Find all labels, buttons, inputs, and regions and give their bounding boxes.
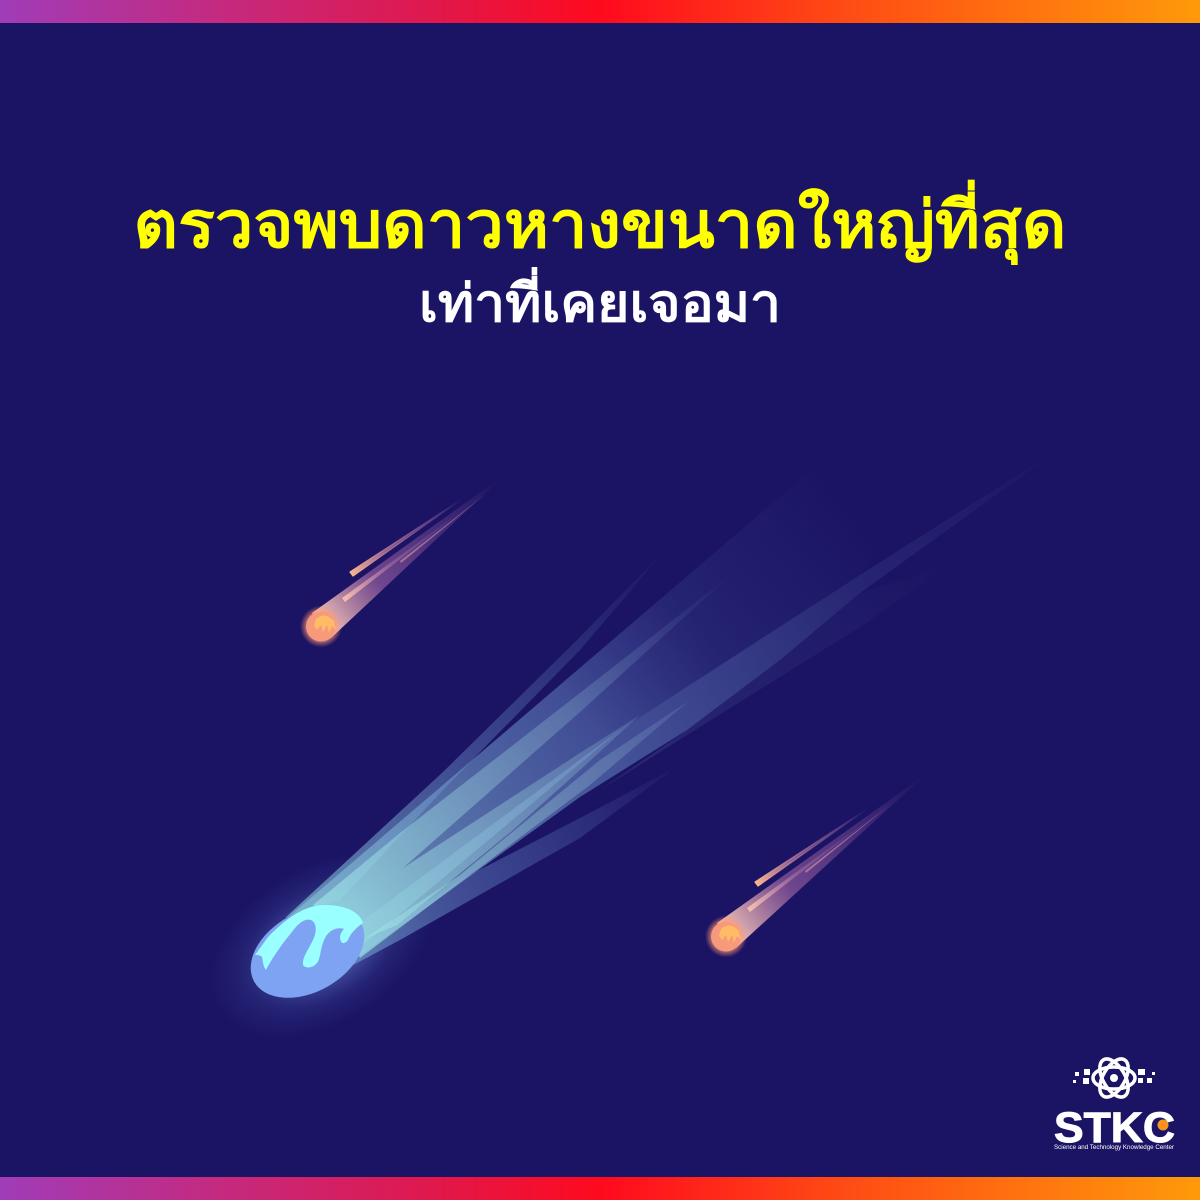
comet ice cap — [255, 905, 363, 970]
logo pixel dots — [1073, 1069, 1155, 1084]
tail: lower bright stripe — [355, 700, 690, 958]
tail — [312, 473, 507, 638]
logo atom mark — [1093, 1054, 1135, 1102]
top gradient bar — [0, 0, 1200, 23]
tail: long streak — [330, 445, 1065, 970]
small comet: upper left — [300, 473, 507, 648]
large comet — [177, 437, 1065, 1076]
inner streak — [747, 815, 875, 912]
glow — [300, 606, 342, 648]
glow — [705, 916, 747, 958]
logo wordmark: STKC — [1054, 1104, 1175, 1152]
streak — [755, 807, 870, 886]
tail: bright core — [313, 573, 733, 940]
small comet: lower right — [705, 775, 925, 958]
tail — [717, 775, 925, 948]
inner streak — [342, 505, 470, 602]
logo orange dot — [1158, 1120, 1168, 1130]
bottom gradient bar — [0, 1177, 1200, 1200]
thin streak — [805, 803, 892, 873]
streak — [350, 497, 465, 576]
logo tagline: Science and Technology Knowledge Center — [1054, 1145, 1174, 1151]
thin streak — [400, 493, 487, 563]
flame — [314, 615, 336, 633]
head — [306, 612, 336, 642]
flame — [719, 925, 741, 943]
subtitle: เท่าที่เคยเจอมา — [419, 275, 781, 333]
title: ตรวจพบดาวหางขนาดใหญ่ที่สุด — [134, 189, 1066, 261]
tail: lower ray — [340, 768, 675, 972]
glow — [177, 814, 467, 1076]
comet body — [235, 887, 380, 1017]
tail: thin upper ray — [285, 547, 668, 918]
tail: wide faint fan — [285, 437, 905, 960]
head — [711, 922, 741, 952]
tail: faint lower edge — [600, 565, 950, 790]
